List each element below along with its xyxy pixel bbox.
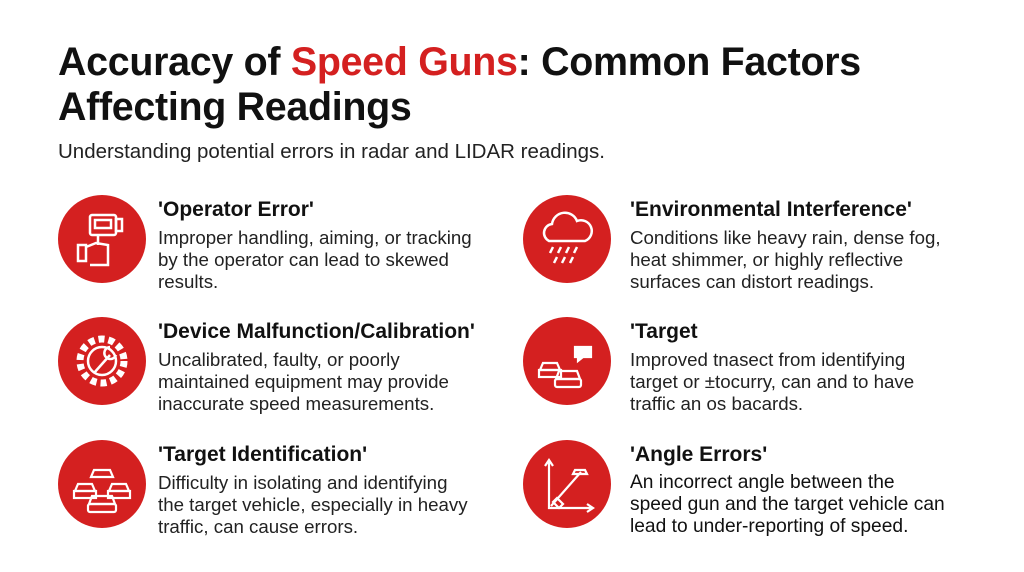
panel: device malfunction: inaccurate speed measurements. (158, 393, 434, 414)
title (58, 40, 861, 129)
panel: angle errors: An incorrect angle between the (630, 472, 895, 493)
panel: device malfunction: Uncalibrated, faulty, or poorly (158, 349, 400, 370)
panel: device malfunction (58, 317, 475, 414)
title: Accuracy of Speed Guns: Common Factors (58, 40, 861, 84)
panel: environmental interference: Conditions like heavy rain, dense fog, (630, 227, 941, 248)
title: Affecting Readings (58, 85, 412, 129)
panel: operator error (58, 195, 472, 292)
panel: target: 'Target (630, 320, 698, 343)
panel: environmental interference: heat shimmer, or highly reflective (630, 249, 903, 270)
icon: gear and wrench (58, 317, 146, 405)
panel: target: target or ±tocurry, can and to have (630, 371, 914, 392)
icon: cars in traffic (58, 440, 146, 528)
panel: target identification (58, 440, 468, 537)
panel: target identification: Difficulty in isolating and identifying (158, 472, 447, 493)
panel: operator error: 'Operator Error' (158, 198, 314, 221)
icon: cars with speech bubble (523, 317, 611, 405)
icon: rain cloud (523, 195, 611, 283)
panel: angle errors: lead to under-reporting of speed. (630, 516, 908, 537)
panel: target identification: the target vehicle, especially in heavy (158, 494, 468, 515)
panel: device malfunction: 'Device Malfunction/Calibration' (158, 320, 475, 343)
panel: angle errors: speed gun and the target vehicle can (630, 494, 945, 515)
panel: operator error: Improper handling, aiming, or tracking (158, 227, 472, 248)
panel: operator error: results. (158, 271, 218, 292)
panel: target identification: traffic, can cause errors. (158, 516, 358, 537)
panel: environmental interference (523, 195, 941, 292)
panel: operator error: by the operator can lead to skewed (158, 249, 449, 270)
panel: environmental interference: surfaces can distort readings. (630, 271, 874, 292)
panel: angle errors (523, 440, 945, 537)
panel: device malfunction: maintained equipment may provide (158, 371, 449, 392)
panel: target (523, 317, 914, 414)
panel: target identification: 'Target Identification' (158, 443, 367, 466)
icon: hand holding speed gun (58, 195, 146, 283)
panel: environmental interference: 'Environmental Interference' (630, 198, 912, 221)
panel: angle errors: 'Angle Errors' (630, 443, 767, 466)
subtitle: Understanding potential errors in radar and LIDAR readings. (58, 140, 605, 163)
icon: angle diagram (523, 440, 611, 528)
panel: target: traffic an os bacards. (630, 393, 803, 414)
panel: target: Improved tnasect from identifying (630, 349, 905, 370)
